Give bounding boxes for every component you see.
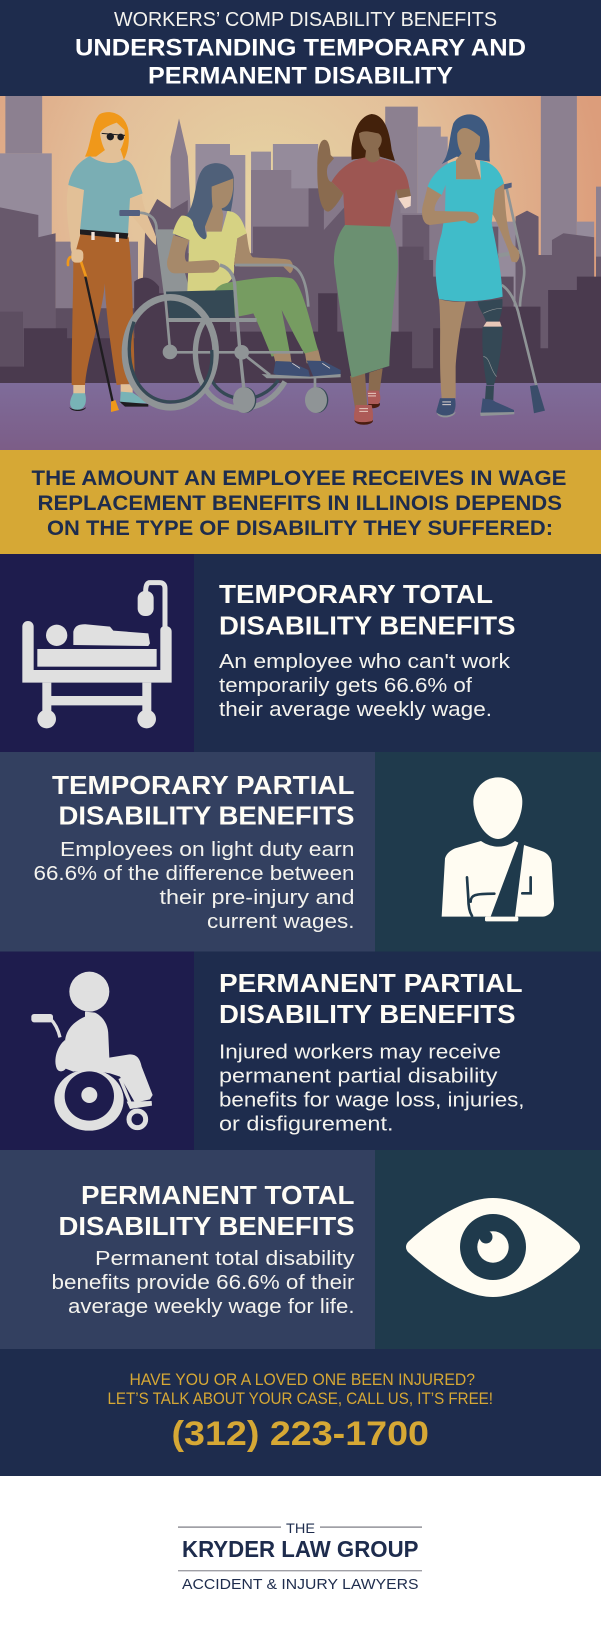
skyline xyxy=(0,96,601,383)
panel: permanent total disability: DISABILITY BENEFITS xyxy=(58,1211,355,1241)
panel: header xyxy=(0,0,601,96)
panel: permanent partial disability xyxy=(0,952,601,1150)
panel: permanent total disability xyxy=(0,1150,601,1349)
panel: permanent partial disability: permanent partial disability xyxy=(219,1066,498,1088)
description: Injured workers may receive xyxy=(219,1042,501,1064)
panel: temporary total disability: DISABILITY BENEFITS xyxy=(219,610,516,640)
icon: person with arm sling xyxy=(442,777,554,921)
panel: temporary partial disability: 66.6% of the difference between xyxy=(34,863,354,885)
panel: permanent partial disability: or disfigurement. xyxy=(219,1114,394,1136)
logo: The Kryder Law Group: THE xyxy=(286,1520,315,1536)
heading: PERMANENT PARTIAL xyxy=(219,968,523,998)
eyebrow heading: WORKERS’ COMP DISABILITY BENEFITS xyxy=(114,9,497,31)
panel: permanent partial disability: DISABILITY BENEFITS xyxy=(219,999,516,1029)
description: An employee who can't work xyxy=(219,651,511,673)
intro line one: THE AMOUNT AN EMPLOYEE RECEIVES IN WAGE xyxy=(32,466,566,490)
panel: call to action xyxy=(0,1349,601,1476)
figure: woman with cane and dark glasses xyxy=(67,112,156,412)
intro line three: ON THE TYPE OF DISABILITY THEY SUFFERED: xyxy=(47,516,553,540)
heading: PERMANENT TOTAL xyxy=(81,1180,355,1210)
phone number: (312) 223-1700 xyxy=(172,1415,429,1453)
panel: temporary total disability: temporarily gets 66.6% of xyxy=(219,675,472,697)
description: Permanent total disability xyxy=(95,1248,354,1270)
icon: hospital bed xyxy=(22,583,172,728)
panel: call to action: LET’S TALK ABOUT YOUR CASE, CALL US, IT’S FREE! xyxy=(108,1390,493,1408)
logo: The Kryder Law Group: KRYDER LAW GROUP xyxy=(182,1536,418,1562)
icon: eye xyxy=(406,1198,580,1297)
figure: woman in wheelchair xyxy=(119,163,341,413)
figure: woman raising her hand xyxy=(317,114,411,425)
intro line two: REPLACEMENT BENEFITS IN ILLINOIS DEPENDS xyxy=(38,491,562,515)
heading: TEMPORARY PARTIAL xyxy=(52,770,355,800)
panel: temporary partial disability: their pre-injury and xyxy=(160,887,354,909)
figure: woman with crutch and prosthetic leg xyxy=(422,114,545,417)
panel: temporary partial disability xyxy=(0,752,601,952)
logo: The Kryder Law Group: ACCIDENT & INJURY LAWYERS xyxy=(182,1577,418,1593)
description: Employees on light duty earn xyxy=(60,839,354,861)
call to action text: HAVE YOU OR A LOVED ONE BEEN INJURED? xyxy=(130,1371,475,1389)
panel: permanent total disability: benefits provide 66.6% of their xyxy=(52,1272,355,1294)
title line two: PERMANENT DISABILITY xyxy=(148,62,453,90)
panel: intro banner xyxy=(0,450,601,554)
panel: permanent partial disability: benefits for wage loss, injuries, xyxy=(219,1090,524,1112)
logo: The Kryder Law Group xyxy=(178,1520,422,1593)
panel: temporary total disability xyxy=(0,554,601,752)
panel: temporary partial disability: DISABILITY BENEFITS xyxy=(58,800,355,830)
panel: permanent total disability: average weekly wage for life. xyxy=(68,1296,354,1318)
title line one: UNDERSTANDING TEMPORARY AND xyxy=(75,34,526,62)
ground xyxy=(0,383,601,450)
icon: person in wheelchair xyxy=(31,972,153,1131)
heading: TEMPORARY TOTAL xyxy=(219,579,493,609)
panel: temporary total disability: their average weekly wage. xyxy=(219,699,492,721)
panel: temporary partial disability: current wages. xyxy=(207,911,354,933)
illustration: people with disabilities in front of a city skyline xyxy=(0,96,601,450)
